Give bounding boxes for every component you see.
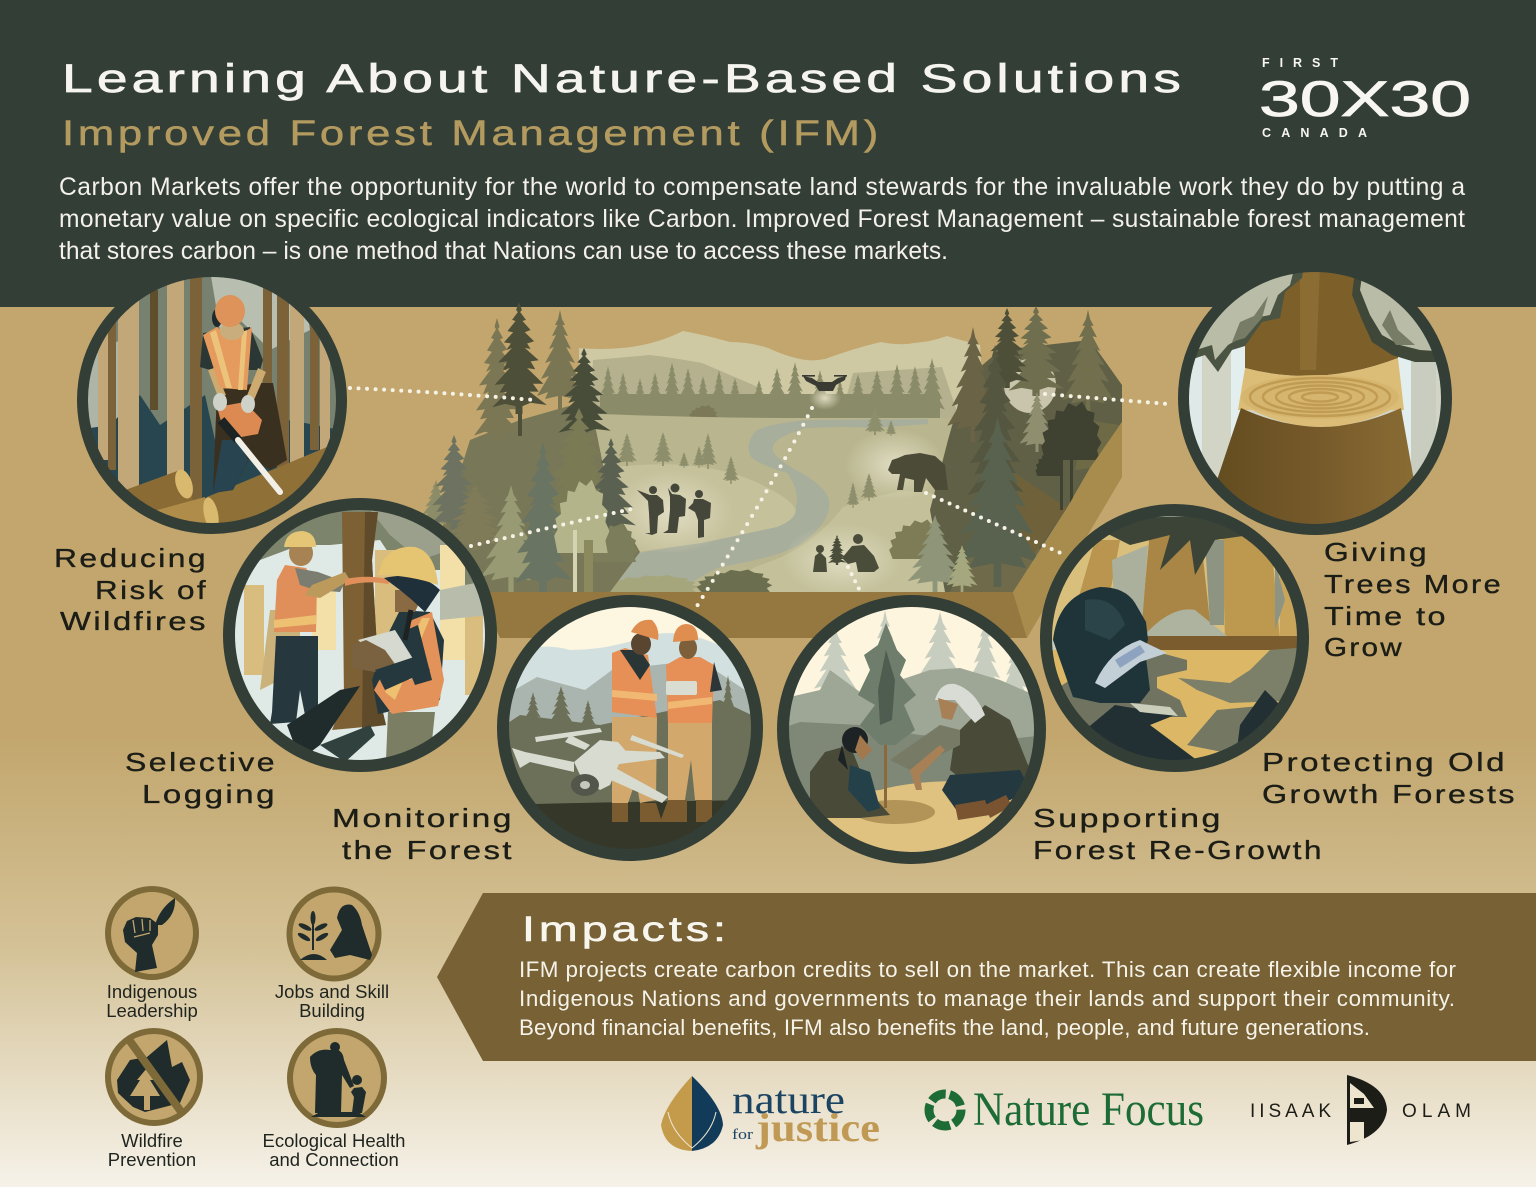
label: Leadership	[106, 1000, 198, 1021]
drone	[512, 728, 684, 803]
impacts text: Beyond financial benefits, IFM also benefits the land, people, and future generations.	[519, 1015, 1370, 1040]
label: reducing risk of wildfires: Reducing	[54, 543, 208, 573]
label: protecting old growth forests: Protecting Old	[1262, 747, 1507, 777]
label: selective logging	[125, 747, 277, 809]
circle: monitoring the forest	[497, 595, 762, 860]
label: and Connection	[269, 1149, 399, 1170]
impacts heading: Impacts:	[522, 910, 730, 949]
label: supporting forest re-growth: Supporting	[1033, 803, 1223, 833]
label: monitoring the forest	[332, 803, 514, 865]
subtitle: Improved Forest Management (IFM)	[62, 114, 882, 153]
landscape front wall	[478, 592, 1027, 638]
label: reducing risk of wildfires	[54, 543, 208, 636]
label: protecting old growth forests: Growth Forests	[1262, 779, 1517, 809]
kneeling person	[810, 745, 890, 818]
intro text: Carbon Markets offer the opportunity for the world to compensate land stewards for the invaluable work they do by putting a	[59, 174, 1465, 201]
label: selective logging: Logging	[142, 779, 277, 809]
right forest mass	[930, 340, 1122, 592]
landscape side wall	[1013, 422, 1122, 638]
label: Building	[299, 1000, 365, 1021]
logo: First 30x30 Canada	[1259, 56, 1471, 140]
icon: jobs and skill building	[275, 890, 389, 1021]
worker	[213, 383, 287, 493]
label: giving trees more time to grow: Time to	[1324, 601, 1448, 631]
label: Jobs and Skill	[275, 981, 389, 1002]
logo: First 30x30 Canada: CANADA	[1262, 126, 1367, 140]
label: monitoring the forest: the Forest	[342, 835, 514, 865]
silhouette: hikers	[637, 484, 711, 538]
impacts panel	[437, 893, 1536, 1061]
dotted connector: monitoring	[697, 408, 812, 606]
icon: wildfire prevention	[108, 1031, 200, 1170]
label: giving trees more time to grow	[1324, 537, 1503, 662]
central forest landscape	[419, 302, 1122, 638]
silhouette: drone	[802, 375, 847, 410]
logo: nature for justice	[661, 1076, 880, 1151]
surveyor	[386, 712, 435, 760]
left forest mass	[440, 400, 640, 592]
dotted connector: old growth	[926, 493, 1063, 554]
label: supporting forest re-growth: Forest Re-Growth	[1033, 835, 1324, 865]
label: giving trees more time to grow: Grow	[1324, 632, 1404, 662]
dotted connector: regrowth	[848, 567, 861, 593]
logo: nature for justice: for	[732, 1127, 753, 1143]
dotted connector: trees more time	[1045, 394, 1168, 404]
tree trunk	[332, 512, 386, 730]
label: giving trees more time to grow: Trees More	[1324, 569, 1503, 599]
silhouette: bear	[888, 453, 948, 492]
ferns	[1090, 705, 1194, 760]
river	[619, 419, 928, 582]
label: selective logging: Selective	[125, 747, 277, 777]
hanging foliage right	[1352, 278, 1436, 362]
logger with ribbon	[270, 636, 318, 724]
label: giving trees more time to grow: Giving	[1324, 537, 1429, 567]
logs	[127, 470, 194, 510]
impacts text: Indigenous Nations and governments to manage their lands and support their community.	[519, 986, 1455, 1011]
meadow	[594, 414, 952, 592]
technician right	[668, 723, 712, 800]
intro text	[59, 174, 1465, 265]
front left hill	[617, 464, 796, 552]
front right hill	[750, 490, 945, 592]
logo: iisaak olam	[1250, 1075, 1471, 1145]
logo: nature for justice: justice	[755, 1105, 880, 1150]
far mountains	[579, 331, 981, 410]
label: reducing risk of wildfires: Risk of	[95, 575, 208, 605]
meadow trees	[618, 418, 896, 508]
label: Ecological Health	[263, 1130, 405, 1151]
bear	[1053, 587, 1150, 703]
silhouette: planting figures	[813, 534, 879, 572]
logo: First 30x30 Canada: FIRST	[1262, 56, 1338, 70]
logo: nature for justice: nature	[732, 1077, 845, 1122]
header band	[0, 0, 1536, 307]
intro text: monetary value on specific ecological indicators like Carbon. Improved Forest Management – sustainable forest management	[59, 206, 1465, 233]
circle: selective logging	[223, 498, 497, 772]
logo: iisaak olam: OLAM	[1402, 1101, 1471, 1122]
salmon	[1095, 640, 1167, 688]
cut band	[1238, 358, 1404, 410]
logo: nature focus: Nature Focus	[973, 1083, 1204, 1136]
title: Learning About Nature-Based Solutions	[62, 57, 1185, 101]
dotted connector: logging	[350, 388, 534, 400]
label: supporting forest re-growth	[1033, 803, 1324, 865]
label: monitoring the forest: Monitoring	[332, 803, 514, 833]
left trees	[419, 302, 637, 592]
tree rings	[1241, 375, 1402, 427]
fern	[287, 686, 360, 750]
elder	[950, 705, 1028, 778]
icon: indigenous leadership	[106, 889, 198, 1021]
logo: iisaak olam: IISAAK	[1250, 1101, 1331, 1122]
label: Indigenous	[107, 981, 197, 1002]
label: Wildfire	[121, 1130, 183, 1151]
circle: giving trees time	[1178, 262, 1452, 536]
circle: supporting re-growth	[777, 595, 1047, 865]
circle: reducing wildfire risk	[77, 262, 347, 536]
distant tree line	[597, 358, 945, 422]
sapling	[884, 745, 887, 808]
technician left	[612, 717, 657, 803]
hanging foliage left	[1196, 272, 1303, 372]
foreground shrubs	[602, 569, 772, 592]
dotted connector: selective	[471, 508, 636, 546]
intro text: that stores carbon – is one method that Nations can use to access these markets.	[59, 238, 948, 265]
label: protecting old growth forests	[1262, 747, 1517, 809]
impacts text	[519, 957, 1457, 1040]
right trees	[889, 306, 1114, 592]
upper trunk	[1245, 262, 1398, 376]
impacts text: IFM projects create carbon credits to sell on the market. This can create flexible income for	[519, 957, 1457, 982]
label: reducing risk of wildfires: Wildfires	[60, 606, 208, 636]
logo: First 30x30 Canada: 30X30	[1259, 71, 1471, 127]
lower trunk	[1218, 408, 1414, 524]
icon: ecological health	[263, 1031, 405, 1170]
circle: protecting old growth	[1040, 504, 1310, 775]
label: Prevention	[108, 1149, 196, 1170]
